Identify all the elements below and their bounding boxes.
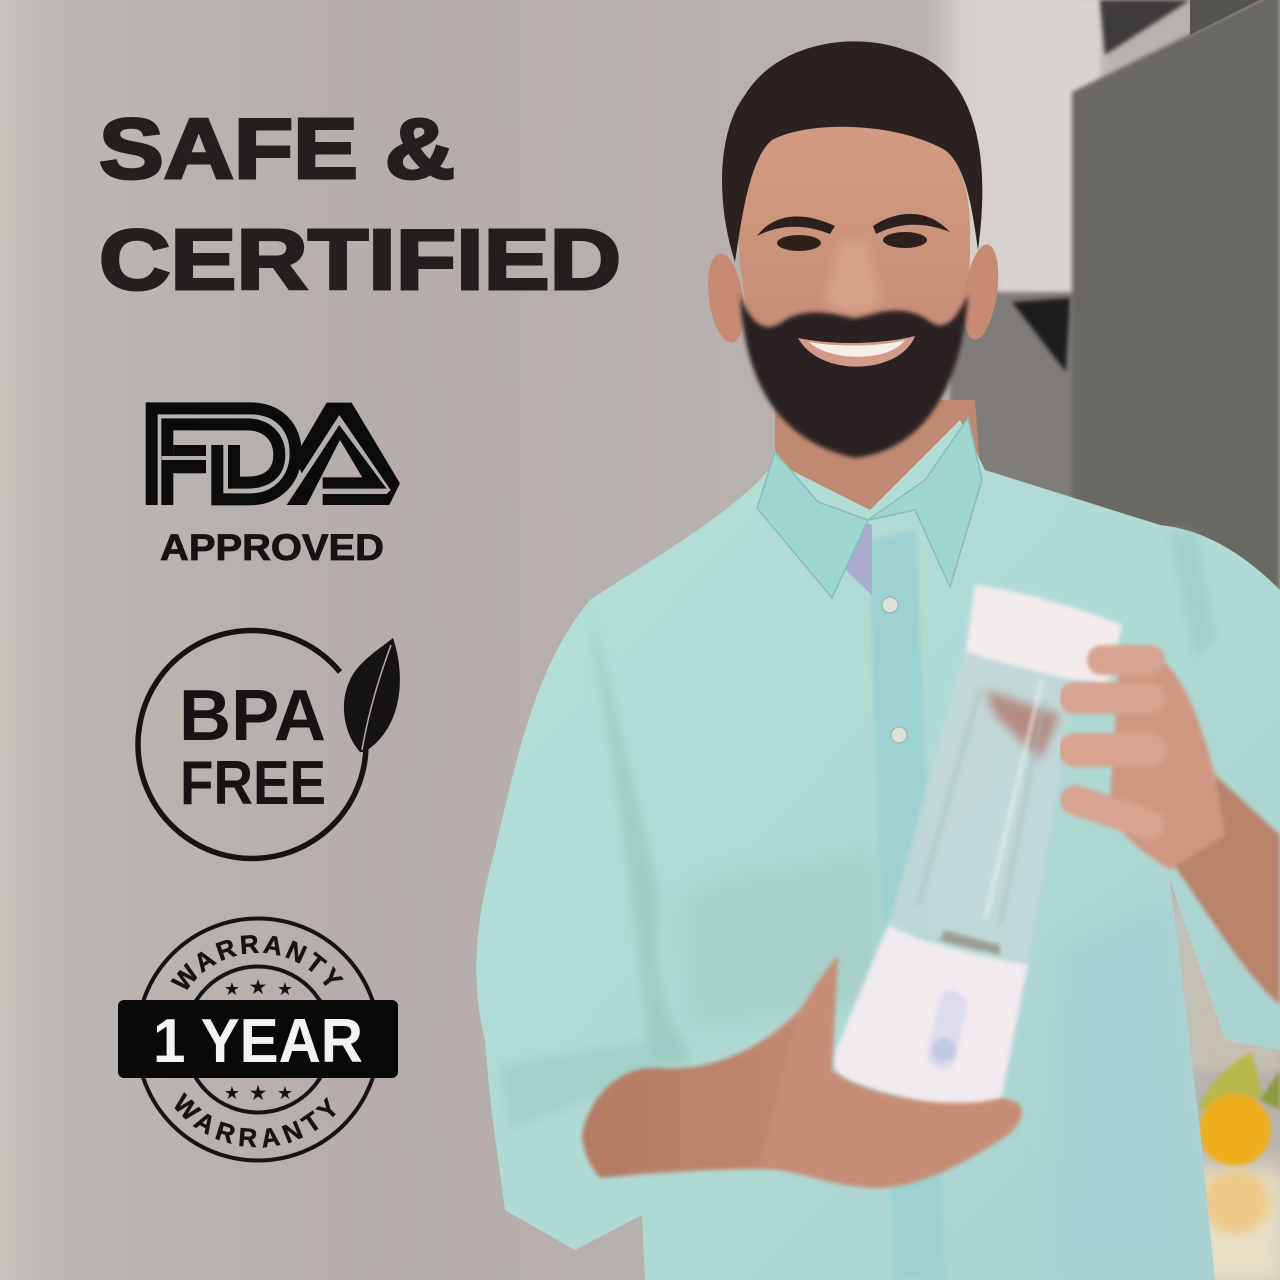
photo: man in shirt holding bottle bbox=[476, 41, 1280, 1280]
inner shirt at collar bbox=[822, 505, 872, 595]
eyes and brows bbox=[757, 214, 950, 251]
black banner bbox=[118, 1000, 398, 1078]
stars bbox=[224, 976, 293, 1105]
bottle base bbox=[834, 925, 1028, 1120]
1 year text: 1 YEAR bbox=[153, 1007, 363, 1076]
bottle indicator bbox=[928, 990, 966, 1069]
title: SAFE & bbox=[99, 102, 455, 197]
badge: BPA free bbox=[138, 630, 400, 858]
bottle bbox=[834, 585, 1122, 1120]
stars: ★ bbox=[277, 979, 293, 999]
circle ring bbox=[138, 630, 366, 858]
shirt body bbox=[476, 420, 1280, 1280]
bottom warranty text: WARRANTY bbox=[174, 1092, 336, 1148]
stars: ★ bbox=[224, 979, 240, 999]
left hand under bottle bbox=[760, 955, 1022, 1188]
top warranty text: WARRANTY bbox=[170, 935, 344, 990]
right forearm bbox=[1170, 775, 1280, 1005]
FREE text: FREE bbox=[180, 749, 326, 818]
BPA text: BPA bbox=[179, 676, 326, 756]
bottle glass bbox=[888, 650, 1075, 965]
rings bbox=[137, 918, 379, 1160]
neck bbox=[775, 400, 980, 515]
mouth bbox=[798, 336, 915, 367]
badge: FDA approved bbox=[152, 403, 400, 568]
title bbox=[99, 102, 621, 308]
shirt buttons bbox=[812, 557, 951, 743]
stars: ★ bbox=[224, 1083, 240, 1103]
sleeve folds and shading bbox=[500, 530, 1215, 1270]
title: CERTIFIED bbox=[99, 213, 621, 308]
badge: one year warranty bbox=[118, 916, 398, 1162]
icon: leaf bbox=[344, 638, 400, 752]
FDA logo bbox=[152, 403, 400, 505]
beard bbox=[740, 295, 968, 458]
right hand with fingers bbox=[1075, 645, 1225, 870]
stars: ★ bbox=[249, 1082, 267, 1105]
shirt collar bbox=[757, 418, 982, 598]
approved label: APPROVED bbox=[160, 527, 384, 568]
nose shading bbox=[825, 240, 882, 314]
left forearm bbox=[582, 1010, 860, 1178]
face bbox=[738, 108, 970, 440]
bottle cap bbox=[966, 585, 1122, 685]
stars: ★ bbox=[277, 1083, 293, 1103]
photo: fruit on counter bbox=[1198, 1052, 1280, 1234]
hair bbox=[722, 41, 982, 262]
stars: ★ bbox=[249, 976, 267, 999]
shirt placket bbox=[868, 530, 945, 1280]
ears bbox=[703, 242, 1004, 345]
